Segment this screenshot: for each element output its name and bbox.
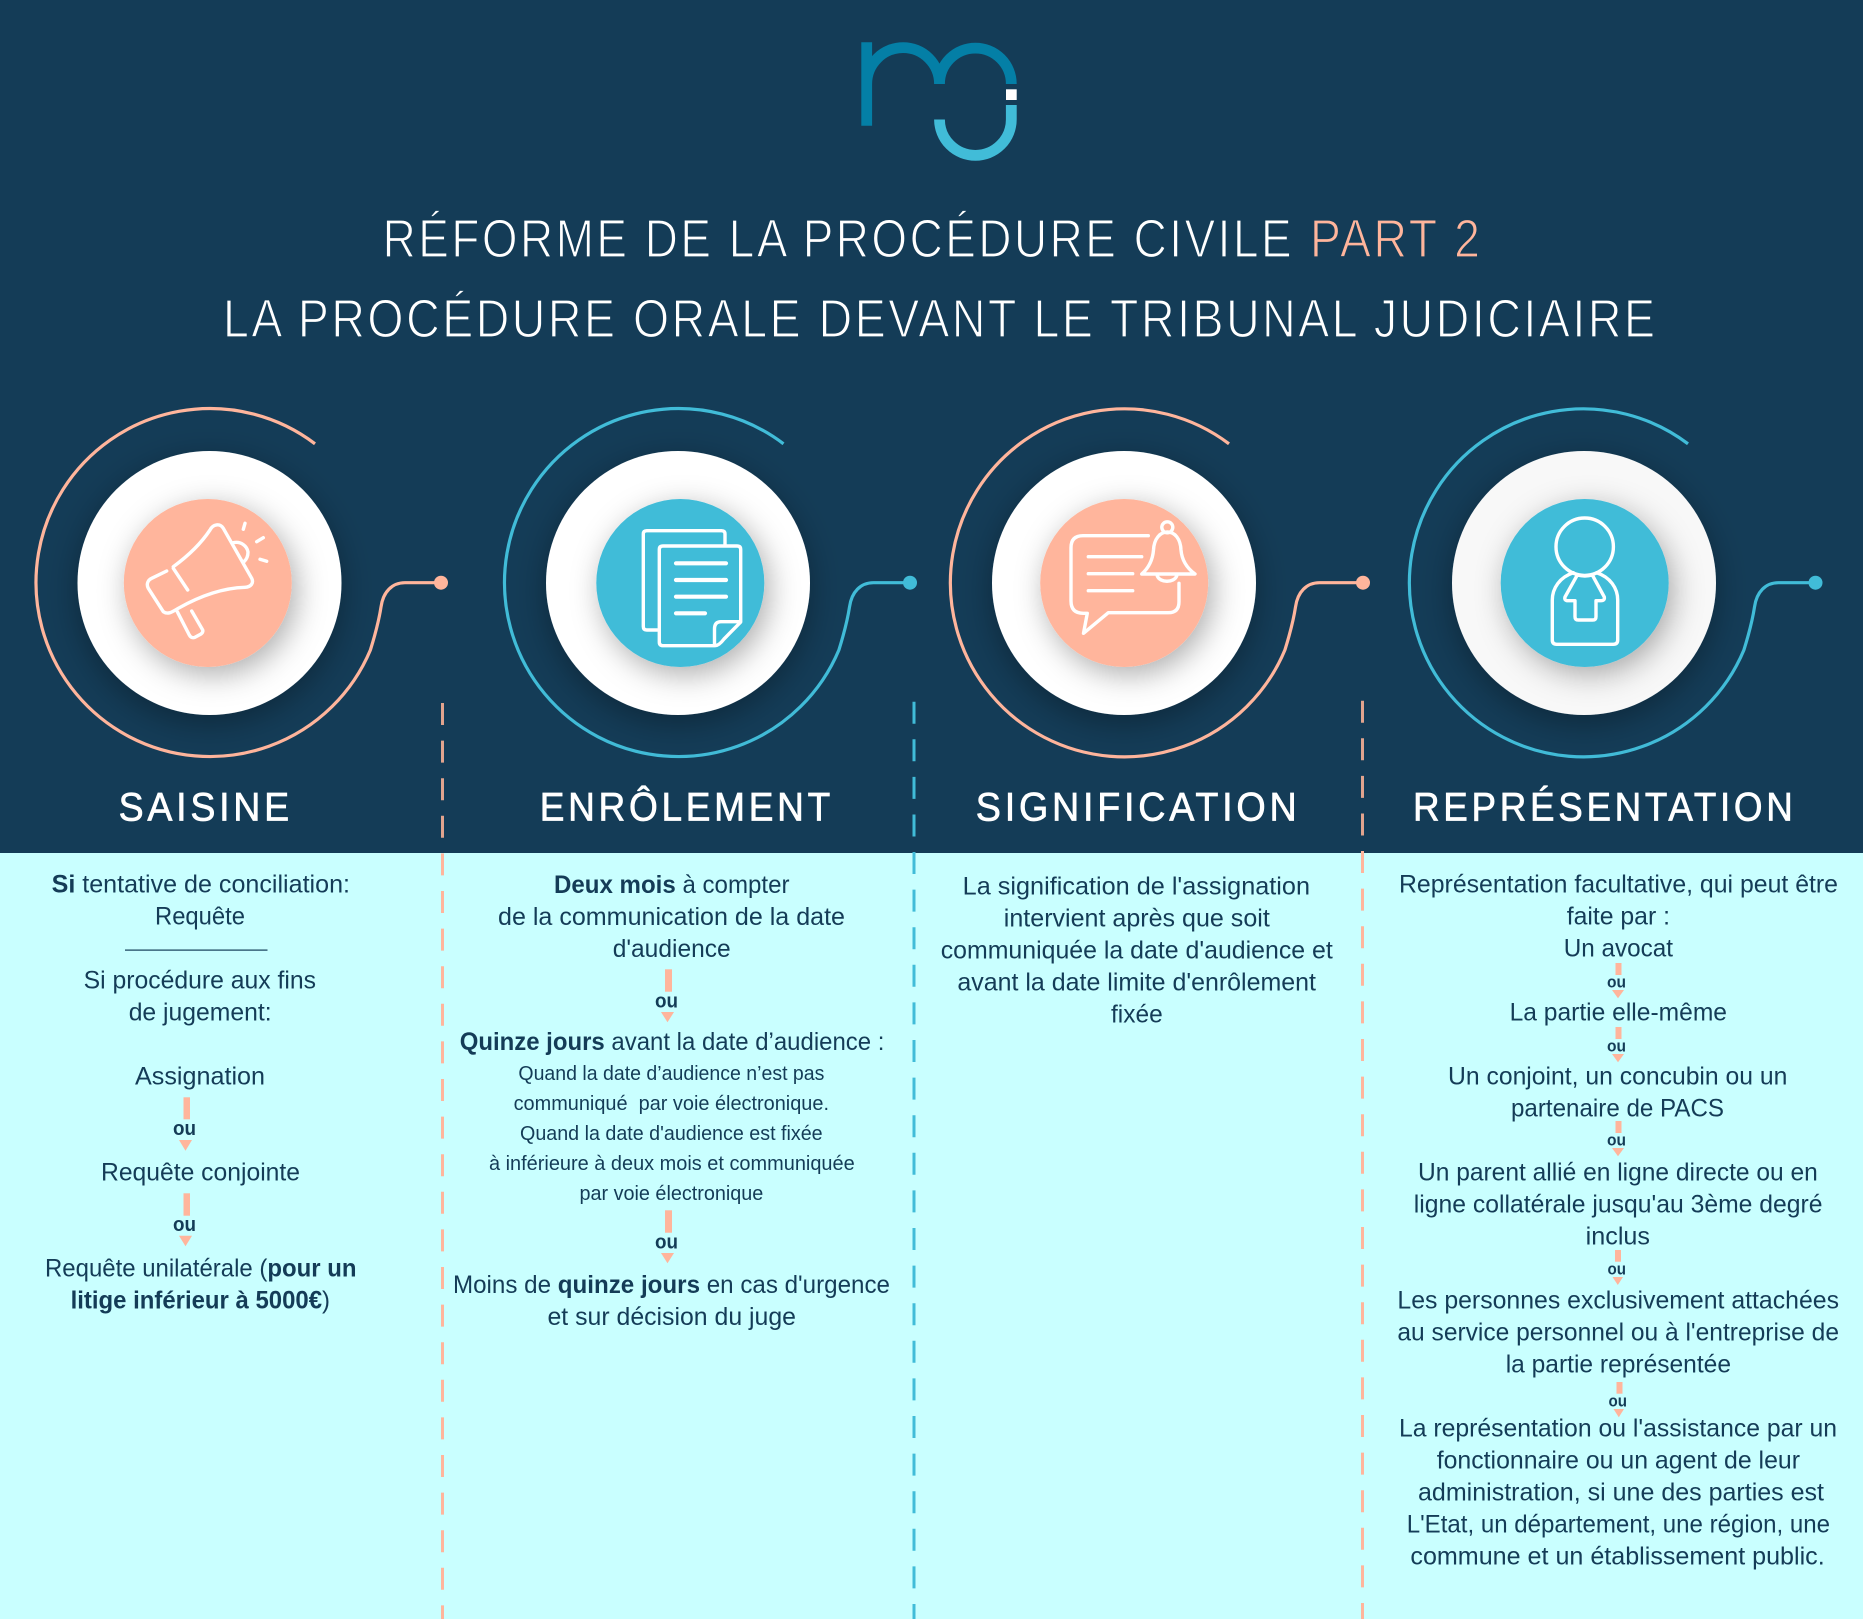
- title: PART 2: [1310, 209, 1482, 269]
- panel: signification medallion: [950, 409, 1370, 757]
- background: dark header: [0, 0, 1863, 853]
- text column: saisine: Requête unilatérale (pour un: [45, 1255, 356, 1283]
- text column: representation: Un avocat: [1564, 934, 1673, 962]
- text column: enrolement: Moins de quinze jours en cas d'urgence: [453, 1271, 890, 1299]
- coloured disc: [1040, 499, 1208, 667]
- coloured disc: [124, 499, 292, 667]
- text column: saisine: Assignation: [135, 1063, 265, 1091]
- text column: saisine: de jugement:: [129, 999, 272, 1027]
- arrow: ou: [1607, 1121, 1626, 1156]
- white disc: [546, 451, 810, 715]
- text column: enrolement: et sur décision du juge: [548, 1303, 796, 1331]
- text column: enrolement: communiqué par voie électronique.: [514, 1092, 829, 1115]
- heading: SAISINE: SAISINE: [119, 786, 293, 830]
- text column: representation: L'Etat, un département, une région, une: [1407, 1510, 1830, 1538]
- title: [223, 209, 1658, 349]
- arrow: ou: ou: [1608, 1259, 1626, 1278]
- text column: representation: [1397, 870, 1839, 1570]
- ring connector: [36, 409, 448, 757]
- text column: representation: au service personnel ou à l'entreprise de: [1397, 1318, 1839, 1346]
- text column: signification: La signification de l'assignation: [963, 873, 1310, 901]
- icon: person with arrow: [1552, 518, 1618, 644]
- arrow: ou: [655, 1210, 678, 1263]
- text column: enrolement: à inférieure à deux mois et communiquée: [489, 1152, 855, 1175]
- text column: saisine: litige inférieur à 5000€): [71, 1287, 330, 1315]
- text column: signification: intervient après que soit: [1004, 905, 1270, 933]
- heading: REPRÉSENTATION: REPRÉSENTATION: [1413, 785, 1796, 830]
- text column: representation: commune et un établissement public.: [1410, 1542, 1825, 1570]
- white disc: [992, 451, 1256, 715]
- text column: signification: avant la date limite d'enrôlement: [957, 969, 1316, 997]
- text column: enrolement: Quand la date d’audience n’est pas: [518, 1062, 824, 1085]
- divider 1: [441, 703, 444, 1619]
- ring connector: [1409, 409, 1822, 757]
- text column: signification: fixée: [1111, 1001, 1163, 1029]
- text column: enrolement: d'audience: [613, 935, 731, 963]
- text column: representation: ligne collatérale jusqu'au 3ème degré: [1414, 1190, 1822, 1218]
- heading: SIGNIFICATION: SIGNIFICATION: [976, 786, 1300, 830]
- logo: [867, 42, 1017, 155]
- text column: representation: Les personnes exclusivement attachées: [1397, 1286, 1839, 1314]
- arrow: ou: [1608, 1382, 1627, 1417]
- white disc: [1452, 451, 1716, 715]
- text column: representation: Un conjoint, un concubin ou un: [1448, 1062, 1787, 1090]
- icon: megaphone: [147, 523, 267, 638]
- coloured disc: [1501, 499, 1669, 667]
- arrow: ou: [1607, 1027, 1626, 1062]
- arrow: ou: [173, 1097, 196, 1151]
- ring connector: [950, 409, 1370, 757]
- divider 3: [1361, 701, 1364, 1619]
- arrow: ou: [1607, 963, 1626, 998]
- text column: representation: fonctionnaire ou un agent de leur: [1437, 1446, 1800, 1474]
- background: light content panel: [0, 853, 1863, 1619]
- text column: representation: La représentation ou l'assistance par un: [1399, 1414, 1837, 1442]
- title: LA PROCÉDURE ORALE DEVANT LE TRIBUNAL JUDICIAIRE: [223, 289, 1658, 349]
- text column: saisine: Requête conjointe: [101, 1159, 300, 1187]
- title: RÉFORME DE LA PROCÉDURE CIVILE: [383, 209, 1294, 269]
- text column: saisine: Requête: [155, 903, 245, 931]
- coloured disc: [596, 499, 764, 667]
- arrow: ou: ou: [173, 1118, 196, 1140]
- divider 2: [912, 702, 916, 1619]
- text column: saisine: [45, 871, 356, 1315]
- arrow: ou: ou: [1607, 1037, 1626, 1056]
- text column: enrolement: par voie électronique: [580, 1182, 763, 1205]
- text column: representation: faite par :: [1567, 902, 1670, 930]
- arrow: ou: ou: [173, 1214, 196, 1236]
- text column: representation: La partie elle-même: [1510, 998, 1727, 1026]
- ring connector: [505, 409, 917, 757]
- icon: documents: [643, 531, 741, 646]
- text column: representation: la partie représentée: [1506, 1350, 1731, 1378]
- arrow: ou: ou: [1607, 973, 1626, 992]
- text column: enrolement: de la communication de la date: [498, 903, 845, 931]
- arrow: ou: [173, 1193, 196, 1246]
- text column: representation: inclus: [1586, 1222, 1650, 1250]
- panel: saisine medallion: [36, 409, 448, 757]
- panel: enrolement medallion: [505, 409, 917, 757]
- panel: representation medallion: [1409, 409, 1822, 757]
- text column: representation: Représentation facultative, qui peut être: [1399, 870, 1838, 898]
- arrow: ou: [655, 969, 678, 1022]
- text column: representation: administration, si une des parties est: [1418, 1478, 1824, 1506]
- arrow: ou: ou: [1608, 1391, 1627, 1410]
- arrow: ou: ou: [655, 1231, 678, 1253]
- arrow: ou: [1608, 1250, 1626, 1285]
- text column: enrolement: Deux mois à compter: [554, 871, 790, 899]
- text column: signification: communiquée la date d'audience et: [941, 937, 1333, 965]
- white disc: [78, 451, 342, 715]
- heading: ENRÔLEMENT: ENRÔLEMENT: [540, 785, 834, 830]
- arrow: ou: ou: [1607, 1131, 1626, 1150]
- icon: chat and bell: [1071, 522, 1195, 633]
- arrow: ou: ou: [655, 990, 678, 1012]
- text column: enrolement: Quinze jours avant la date d’audience :: [460, 1028, 884, 1056]
- text column: signification: [941, 873, 1333, 1029]
- text column: representation: partenaire de PACS: [1511, 1094, 1724, 1122]
- text column: saisine: Si procédure aux fins: [84, 967, 316, 995]
- text column: enrolement: [453, 871, 890, 1331]
- text column: enrolement: Quand la date d'audience est fixée: [520, 1122, 823, 1145]
- text column: saisine: Si tentative de conciliation:: [52, 871, 350, 899]
- text column: representation: Un parent allié en ligne directe ou en: [1418, 1158, 1818, 1186]
